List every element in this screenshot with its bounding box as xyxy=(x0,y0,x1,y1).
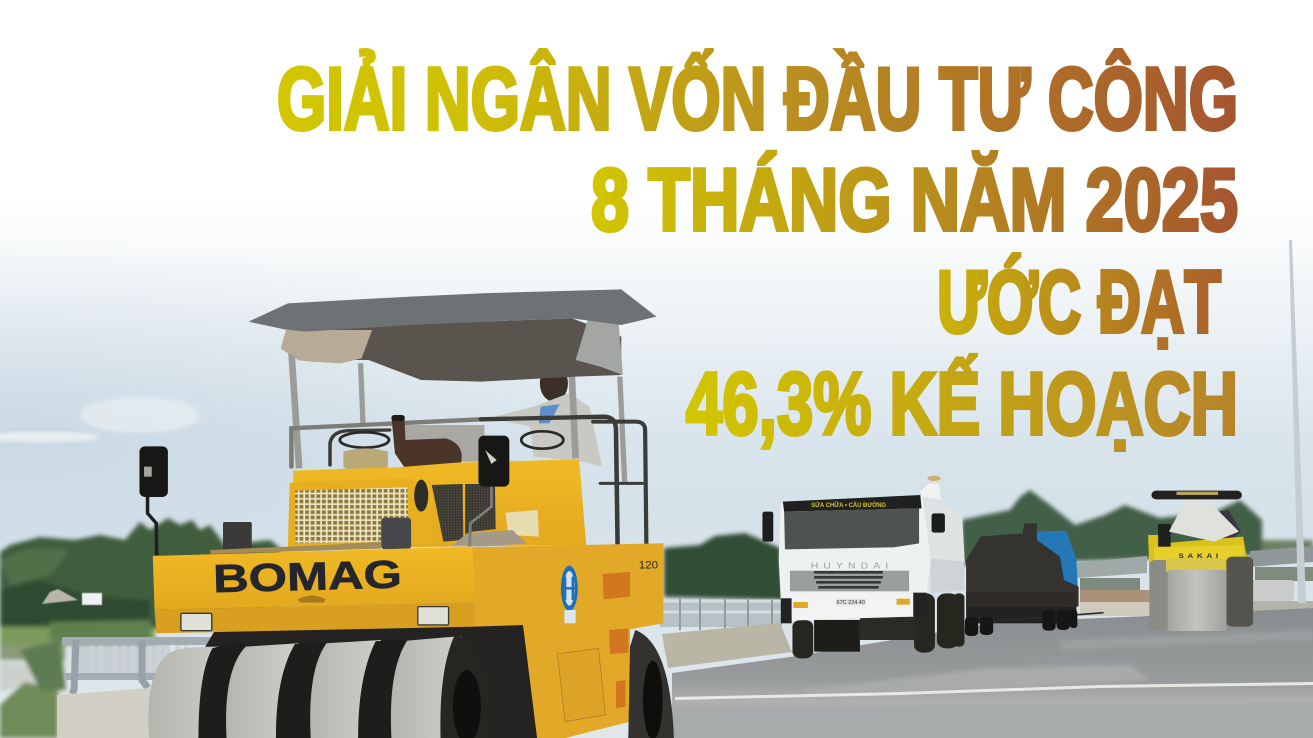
sakai operator xyxy=(1214,510,1241,540)
mesh grille xyxy=(295,487,409,543)
driver xyxy=(495,365,602,467)
left mirror xyxy=(139,446,168,555)
sticker xyxy=(505,510,539,537)
right mirror xyxy=(470,436,509,547)
distant trees left xyxy=(0,518,280,738)
intake pots xyxy=(223,518,411,554)
model label: 120 xyxy=(639,559,659,571)
overpass and ground in background xyxy=(1077,546,1313,616)
lamp post xyxy=(1289,240,1306,603)
sakai body xyxy=(1148,524,1247,607)
side vents xyxy=(603,572,630,708)
upper engine housing xyxy=(293,459,586,548)
beacon xyxy=(343,448,388,479)
sakai white tarp xyxy=(1169,500,1239,542)
front rollers xyxy=(148,635,493,738)
dump truck xyxy=(762,476,965,658)
truck worker xyxy=(920,476,941,500)
seat backing panel xyxy=(404,425,484,462)
front yellow bar with brand: BOMAG xyxy=(213,552,402,601)
road gravel band xyxy=(672,703,1313,738)
truck bumper: 67C 224.40 xyxy=(837,600,865,606)
dirt on deck xyxy=(210,542,381,554)
guard rail and barrier right xyxy=(660,598,792,668)
truck mirrors xyxy=(762,512,945,542)
round gauge xyxy=(414,480,428,512)
big roller xyxy=(139,289,674,738)
truck bumper xyxy=(781,593,927,623)
torn canopy edge xyxy=(576,313,623,375)
undercarriage shadow xyxy=(151,625,541,738)
truck grille with brand: HUYNDAI xyxy=(811,560,888,570)
steering wheels xyxy=(340,431,563,449)
distant trees right xyxy=(664,490,1313,600)
truck header sign: SỬA CHỮA • CẦU ĐƯỜNG xyxy=(811,500,887,509)
sakai wheels xyxy=(1149,557,1253,629)
canopy underside xyxy=(281,318,621,382)
sakai road roller xyxy=(1148,491,1253,631)
lower yellow bar xyxy=(155,602,476,633)
guard rail left xyxy=(62,637,214,694)
sakai canopy xyxy=(1151,491,1242,499)
road surface xyxy=(672,608,1313,738)
canopy top tarp xyxy=(249,289,656,332)
truck grille with brand xyxy=(790,560,909,591)
side vent mesh xyxy=(432,484,496,542)
sakai body: SAKAI xyxy=(1179,553,1218,560)
truck dump bed xyxy=(927,497,965,563)
distant houses left xyxy=(42,589,102,605)
concrete barrier left xyxy=(57,688,150,738)
engine louvre panel xyxy=(288,478,434,547)
canopy posts xyxy=(290,322,625,483)
truck windshield xyxy=(784,508,919,549)
exhaust xyxy=(391,415,462,477)
sakai drum xyxy=(1168,570,1226,631)
road centre line xyxy=(675,682,1313,700)
side body xyxy=(472,543,663,738)
truck cab xyxy=(779,495,931,620)
side access panel xyxy=(557,648,605,722)
road light patches xyxy=(800,630,1313,700)
truck header sign xyxy=(783,495,922,512)
canopy frill xyxy=(281,330,372,363)
rear wheel xyxy=(628,630,674,738)
front yellow bar with brand xyxy=(153,547,476,610)
guard rails xyxy=(291,417,647,571)
asphalt tanker truck xyxy=(965,523,1104,636)
blue logo sticker xyxy=(561,566,578,623)
headlights xyxy=(181,607,449,631)
title xyxy=(277,49,1238,453)
truck wheels xyxy=(792,593,964,658)
